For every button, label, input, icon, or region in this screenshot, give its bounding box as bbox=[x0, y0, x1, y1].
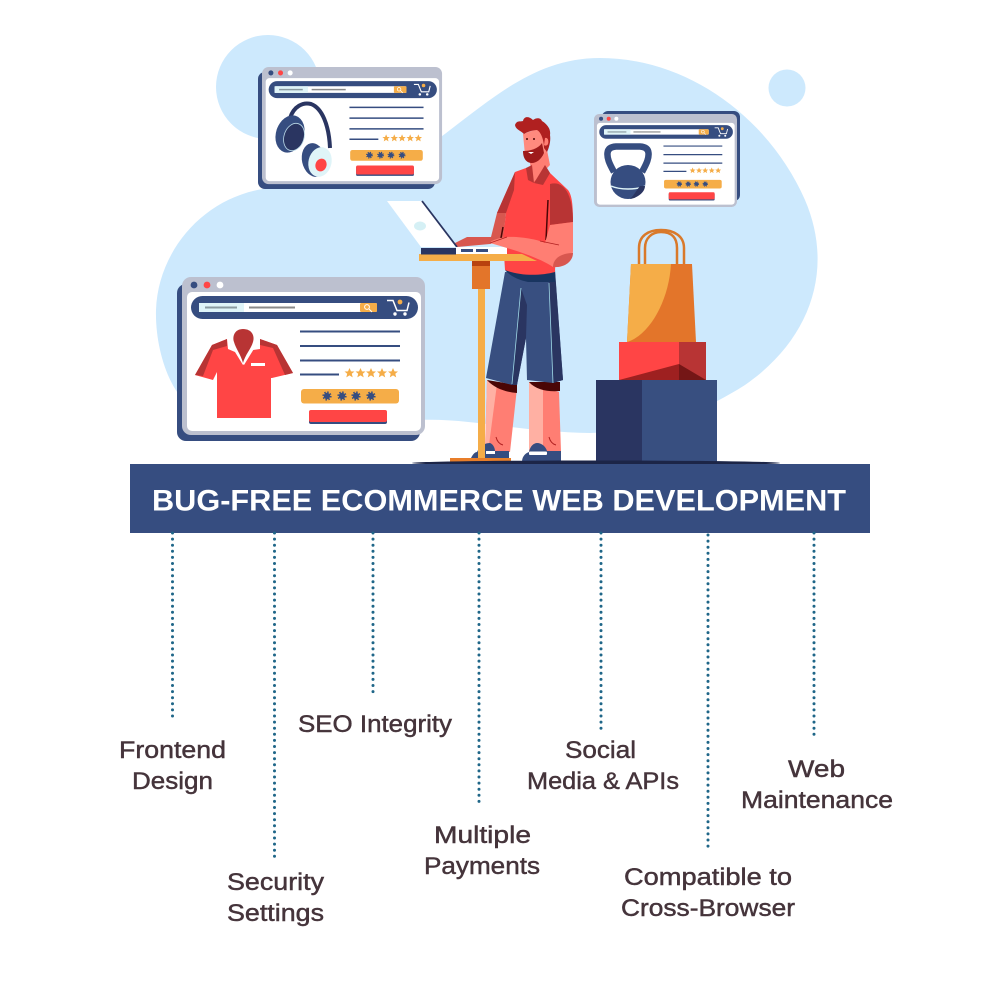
shirt body bbox=[497, 165, 573, 275]
red box bbox=[619, 342, 706, 380]
title banner bbox=[130, 464, 870, 533]
beard bbox=[523, 143, 544, 163]
icon: red polo shirt bbox=[195, 329, 293, 418]
icon: headphones bbox=[271, 104, 335, 179]
collar bbox=[526, 165, 534, 183]
label: Frontend Design: Frontend bbox=[119, 737, 226, 764]
label: Compatible to Cross-Browser: Cross-Browser bbox=[621, 895, 795, 922]
label: Social Media & APIs: Social bbox=[565, 737, 636, 764]
shorts bbox=[486, 272, 563, 385]
label: Frontend Design bbox=[119, 737, 226, 795]
laptop bbox=[387, 201, 507, 254]
face bbox=[523, 128, 547, 160]
standing desk bbox=[419, 254, 537, 462]
man: legs, shorts and torso bbox=[455, 117, 573, 462]
neck bbox=[530, 150, 550, 183]
icon: kettlebell bbox=[607, 146, 649, 199]
bag handles bbox=[639, 230, 684, 264]
gift boxes and shopping bag bbox=[596, 230, 717, 463]
background blob bbox=[156, 35, 818, 433]
browser window: t-shirt bbox=[177, 277, 425, 441]
ear bbox=[544, 138, 548, 146]
ground shadow bbox=[412, 460, 780, 466]
dotted connector lines bbox=[172, 533, 814, 858]
label: Security Settings: Security bbox=[227, 869, 324, 896]
left leg bbox=[485, 380, 517, 452]
label: Web Maintenance: Web bbox=[788, 756, 845, 783]
navy box bbox=[596, 380, 642, 463]
shadow under shorts bbox=[487, 380, 560, 393]
label: Compatible to Cross-Browser: Compatible to bbox=[624, 864, 792, 891]
right leg bbox=[529, 382, 561, 452]
label: Multiple Payments: Multiple bbox=[434, 822, 531, 849]
shopping bag bbox=[627, 264, 696, 342]
label: Multiple Payments bbox=[424, 822, 540, 880]
title banner: BUG-FREE ECOMMERCE WEB DEVELOPMENT bbox=[152, 484, 846, 518]
label: Security Settings: Settings bbox=[227, 900, 324, 927]
browser window: headphones bbox=[258, 67, 442, 189]
label: Social Media & APIs: Media & APIs bbox=[527, 768, 679, 795]
back arm bbox=[455, 213, 506, 247]
label: Security Settings bbox=[227, 869, 324, 927]
label: SEO Integrity: SEO Integrity bbox=[298, 711, 452, 738]
shoes bbox=[471, 443, 509, 459]
label: Multiple Payments: Payments bbox=[424, 853, 540, 880]
label: Compatible to Cross-Browser bbox=[621, 864, 795, 922]
label: Social Media & APIs bbox=[527, 737, 679, 795]
label: Web Maintenance: Maintenance bbox=[741, 787, 893, 814]
browser window: kettlebell bbox=[594, 111, 740, 207]
label: Web Maintenance bbox=[741, 756, 893, 814]
hair bbox=[515, 117, 550, 152]
label: Frontend Design: Design bbox=[132, 768, 213, 795]
man: front arm bbox=[490, 222, 573, 267]
